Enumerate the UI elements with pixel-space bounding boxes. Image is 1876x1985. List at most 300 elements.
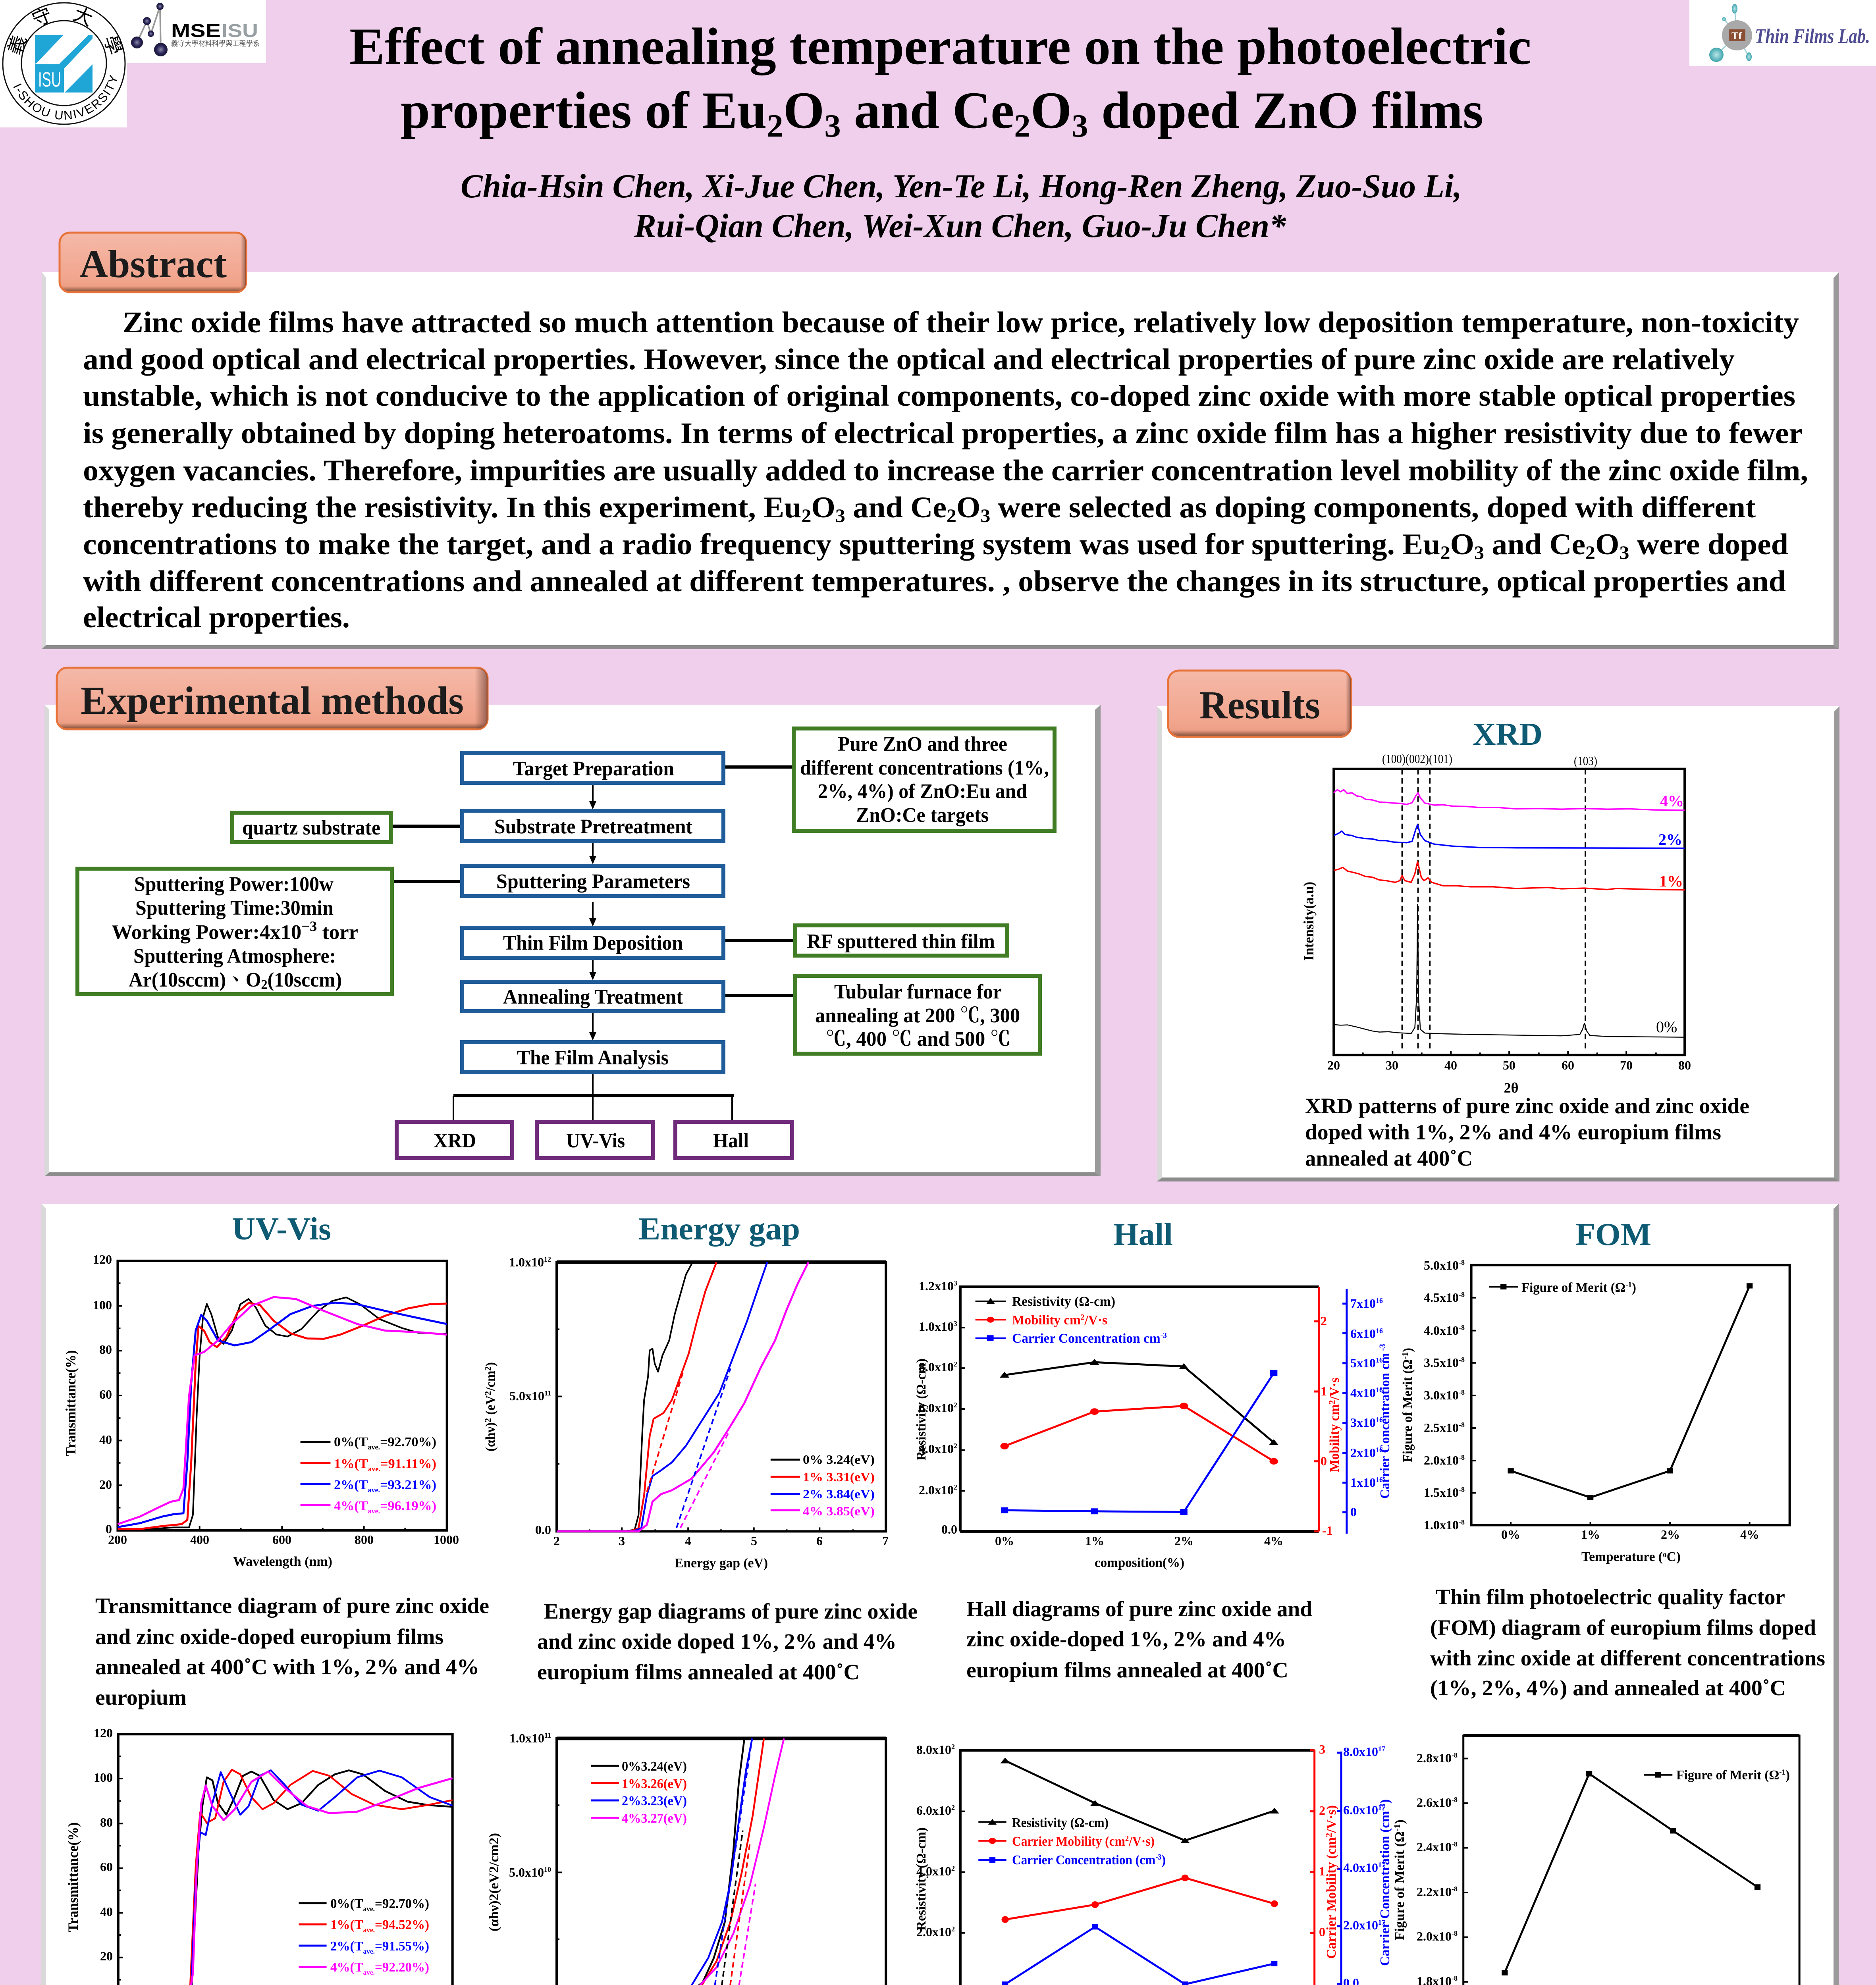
chart: UV-Vis cerium: =91.55%) (375, 1939, 429, 1954)
chart: Hall europium: 16 (1376, 1476, 1383, 1484)
abstract text: and Ce (1484, 528, 1585, 561)
step: Sputtering Parameters: Sputtering Parameters (496, 870, 690, 893)
note: targets: ZnO:Ce targets (856, 804, 989, 827)
chart: Hall cerium: 4.0x10 (916, 1864, 951, 1878)
methods frame (44, 705, 1101, 1176)
chart: UV-Vis europium: 60 (99, 1387, 112, 1401)
note: targets (794, 728, 1055, 831)
chart: FOM cerium: 2.4x10 (1417, 1840, 1452, 1854)
chart: FOM europium: 2.5x10 (1424, 1420, 1459, 1435)
note: targets: different concentrations (1%, (800, 757, 1049, 779)
note: quartz substrate: quartz substrate (242, 817, 380, 839)
chart: Hall cerium: 2 (951, 1743, 955, 1751)
heading: Energy gap: Energy gap (638, 1212, 800, 1247)
chart: UV-Vis cerium: 0%(T (330, 1896, 364, 1911)
chart: Hall cerium: 6.0x10 (1343, 1803, 1378, 1817)
chart: Hall europium: 16 (1376, 1327, 1383, 1335)
abstract text: 2 (1440, 542, 1450, 563)
caption: Hall europium (966, 1597, 1312, 1682)
note: targets: Pure ZnO and three (838, 733, 1007, 755)
chart: Hall europium: 2 (954, 1401, 957, 1409)
caption: UV-Vis europium (95, 1594, 489, 1709)
chart: XRD patterns: 40 (1444, 1058, 1457, 1072)
chart: Hall cerium: -3 (1155, 1853, 1162, 1862)
chart: Hall cerium: Carrier Mobility (cm (1324, 1837, 1339, 1959)
title: O (783, 81, 824, 139)
chart: UV-Vis europium: =92.70%) (380, 1435, 436, 1449)
chart: FOM cerium: ) (1785, 1768, 1790, 1783)
chart: Hall cerium: 2 (951, 1804, 955, 1812)
logo: MSEISU: MSE (171, 20, 221, 41)
chart: XRD patterns: (100)(002)(101) (1382, 752, 1452, 766)
chart: FOM europium: 2.0x10 (1424, 1453, 1459, 1467)
chart: Hall europium: 4x10 (1350, 1386, 1376, 1400)
chart: Hall cerium: 17 (1378, 1745, 1385, 1753)
chart: FOM europium: 1.0x10 (1424, 1518, 1459, 1532)
chart: Hall europium: Carrier Concentration cm (1378, 1347, 1392, 1499)
results frame (1157, 706, 1839, 1181)
chart: Hall europium: 16 (1376, 1297, 1383, 1305)
methods heading tab: Experimental methods (81, 678, 464, 723)
chart: UV-Vis europium: 0%(T (334, 1435, 368, 1449)
abstract frame (42, 272, 1839, 649)
chart: Hall europium: 6.0x10 (919, 1401, 954, 1415)
chart: energy gap cerium: 1%3.26(eV) (622, 1777, 687, 1791)
abstract text: 3 (980, 505, 990, 526)
chart: Hall cerium: Carrier Mobility (cm (1012, 1834, 1134, 1849)
chart: FOM europium: ) (1632, 1280, 1636, 1295)
chart: Hall europium: Resistivity (Ω-cm) (1012, 1294, 1115, 1309)
chart: FOM europium (1400, 1258, 1790, 1564)
abstract text: 2 (1585, 542, 1595, 563)
chart: Hall cerium: 8.0x10 (916, 1742, 951, 1757)
note: sputtering conditions: Ar(10sccm)、O (129, 969, 267, 991)
chart: UV-Vis cerium: =94.52%) (375, 1918, 429, 1932)
chart: Hall cerium: 2 (1324, 1833, 1334, 1837)
chart: Hall europium: 2 (954, 1360, 957, 1368)
chart: UV-Vis europium: 600 (272, 1532, 291, 1547)
chart: Hall europium: 16 (1376, 1386, 1383, 1394)
logo: MSEISU: 義守大學材料科學與工程學系 (171, 40, 260, 48)
logo: Thin Films Lab: Tf (1731, 30, 1742, 42)
abstract text: 2 (801, 505, 811, 526)
step: Thin Film Deposition: Thin Film Deposition (503, 932, 683, 954)
authors: Chia-Hsin Chen, Xi-Jue Chen, Yen-Te Li, Hong-Ren Zheng, Zuo-Suo Li, (461, 168, 1462, 205)
chart: FOM cerium: -8 (1452, 1885, 1458, 1893)
chart: Hall cerium: 17 (1378, 1918, 1385, 1926)
chart: FOM cerium: 2.6x10 (1417, 1795, 1452, 1810)
caption: energy gap europium (537, 1599, 918, 1684)
abstract text: Zinc oxide films have attracted so much attention because of their low price, relatively low deposition temperature, non-toxicity (123, 306, 1799, 339)
chart: Hall europium: 3 (954, 1320, 957, 1328)
chart: energy gap europium: 4% 3.85(eV) (803, 1504, 875, 1518)
chart: Hall europium: 8.0x10 (919, 1360, 954, 1374)
chart: UV-Vis europium: ave. (368, 1443, 380, 1451)
caption: FOM europium: with zinc oxide at different concentrations (1430, 1646, 1825, 1670)
chart: Hall europium: -1 (1322, 1523, 1333, 1538)
chart: energy gap europium: 2 (483, 1366, 493, 1371)
chart: FOM europium: 5.0x10 (1424, 1258, 1459, 1272)
chart: FOM europium: Figure of Merit (Ω (1521, 1280, 1629, 1295)
chart: energy gap europium: 2 (483, 1391, 493, 1395)
chart: energy gap europium (483, 1255, 889, 1571)
note: tubular furnace (795, 976, 1040, 1054)
chart: UV-Vis cerium: 40 (100, 1904, 113, 1919)
logo: MSEISU: ISU (222, 20, 258, 41)
caption: UV-Vis europium: europium (95, 1685, 187, 1709)
chart: FOM europium: -8 (1459, 1388, 1465, 1396)
flowchart arrowheads (589, 801, 596, 1041)
chart: FOM europium: 0% (1501, 1527, 1520, 1542)
abstract text: unstable, which is not conducive to the application of original components, co-doped zinc oxide with more stable optical properties (83, 380, 1795, 412)
abstract text: were selected as doping components, doped with different (990, 491, 1756, 524)
abstract text: oxygen vacancies. Therefore, impurities are usually added to increase the carrier concentration level mobility of the zinc oxide film, (83, 454, 1808, 487)
chart: FOM europium: -8 (1459, 1356, 1465, 1364)
heading: FOM: FOM (1575, 1217, 1651, 1252)
chart: UV-Vis cerium: Transmittance(%) (65, 1822, 81, 1932)
chart: Hall europium: 1x10 (1350, 1475, 1376, 1490)
authors: Rui-Qian Chen, Wei-Xun Chen, Guo-Ju Chen* (634, 207, 1286, 245)
chart: UV-Vis europium: Wavelength (nm) (233, 1554, 332, 1569)
chart: energy gap europium: 4 (685, 1534, 691, 1548)
chart: FOM europium: 4.5x10 (1424, 1290, 1459, 1305)
note: tubular furnace: annealing at 200 ℃, 300 (815, 1004, 1020, 1027)
chart: energy gap europium: ) (483, 1362, 498, 1366)
chart: energy gap europium: (αhν) (483, 1421, 498, 1451)
methods heading tab (57, 668, 488, 729)
chart: Hall europium: /V·s (1327, 1378, 1342, 1401)
chart: FOM europium: -8 (1459, 1291, 1465, 1299)
chart: energy gap cerium: 4%3.27(eV) (622, 1811, 687, 1826)
chart: Hall cerium: ) (1162, 1853, 1166, 1867)
chart: Hall cerium: 17 (1378, 1861, 1385, 1869)
chart: Hall europium: 6x10 (1350, 1326, 1376, 1341)
chart: UV-Vis europium: 800 (355, 1532, 374, 1547)
caption: FOM europium: (FOM) diagram of europium films doped (1430, 1615, 1816, 1640)
chart: UV-Vis europium: 80 (99, 1342, 112, 1357)
chart: energy gap cerium: 0%3.24(eV) (622, 1759, 687, 1774)
abstract heading tab: Abstract (79, 242, 227, 286)
chart: UV-Vis cerium: 4%(T (330, 1960, 364, 1975)
results 2 frame (41, 1204, 1839, 1985)
caption: UV-Vis europium: annealed at 400˚C with 1%, 2% and 4% (95, 1655, 479, 1679)
chart: XRD patterns: (103) (1574, 754, 1597, 768)
chart: FOM cerium: 2.2x10 (1417, 1885, 1452, 1899)
chart: Hall europium: 3 (954, 1279, 957, 1287)
chart: Hall europium: 2 (1081, 1313, 1085, 1322)
chart: UV-Vis europium: 40 (99, 1432, 112, 1447)
abstract text: were doped (1629, 528, 1788, 561)
chart: UV-Vis cerium: 1%(T (330, 1918, 364, 1932)
chart: UV-Vis europium: 400 (190, 1532, 209, 1547)
step: Thin Film Deposition (462, 928, 723, 958)
abstract text: 3 (1620, 542, 1629, 563)
chart: UV-Vis cerium: =92.70%) (375, 1896, 429, 1911)
chart: energy gap europium: 11 (544, 1389, 551, 1397)
chart: FOM europium: Figure of Merit (Ω (1400, 1355, 1415, 1462)
chart: energy gap europium: 1.0x10 (509, 1255, 544, 1269)
title: Effect of annealing temperature on the photoelectric (349, 17, 1531, 75)
panel: results XRD (1157, 671, 1839, 1181)
abstract text: is generally obtained by doping heteroatoms. In terms of electrical properties, a zinc oxide film has a higher resistivity due to fewer (83, 417, 1803, 450)
chart: Hall europium: 16 (1376, 1446, 1383, 1454)
chart: Hall cerium: 2.0x10 (1343, 1918, 1378, 1932)
chart: FOM cerium: 2.8x10 (1417, 1751, 1452, 1765)
chart: UV-Vis cerium (65, 1726, 465, 1985)
chart: Hall europium: 2 (1321, 1314, 1327, 1328)
chart: FOM europium: -8 (1459, 1258, 1465, 1266)
abstract text: O (1595, 528, 1620, 561)
chart: Hall cerium: 2 (951, 1864, 955, 1872)
chart: energy gap cerium (487, 1731, 893, 1985)
authors (461, 168, 1462, 245)
heading: Hall: Hall (1113, 1217, 1173, 1252)
flowchart connectors (393, 767, 793, 1120)
note: tubular furnace: Tubular furnace for (834, 981, 1002, 1003)
chart: Hall cerium: 8.0x10 (1343, 1744, 1378, 1759)
chart: UV-Vis cerium: ave. (363, 1968, 375, 1976)
chart: XRD patterns: 20 (1327, 1058, 1340, 1072)
chart: XRD patterns: 1% (1659, 872, 1683, 890)
chart: FOM europium: ) (1400, 1348, 1415, 1352)
title: 3 (824, 108, 841, 144)
chart: FOM europium: -8 (1459, 1324, 1465, 1332)
chart: energy gap europium: /cm (483, 1371, 498, 1391)
note: sputtering conditions: Working Power:4x10 (112, 921, 299, 944)
chart: UV-Vis cerium: 120 (94, 1726, 113, 1740)
chart: FOM europium: -1 (1625, 1280, 1632, 1289)
abstract text: O (811, 491, 835, 524)
chart: FOM europium: 1.5x10 (1424, 1485, 1459, 1499)
chart: Hall europium: 2 (954, 1483, 957, 1491)
step: Substrate Pretreatment: Substrate Pretreatment (494, 815, 693, 838)
caption: FOM europium (1430, 1585, 1825, 1700)
title: O (1031, 81, 1072, 139)
note: RF sputtered thin film: RF sputtered thin film (807, 930, 995, 953)
title: 2 (767, 108, 783, 144)
note: sputtering conditions: (10sccm) (268, 969, 342, 991)
chart: UV-Vis europium: 1%(T (334, 1457, 368, 1471)
chart: FOM europium: 2% (1661, 1527, 1680, 1542)
analysis: UV-Vis: UV-Vis (566, 1129, 625, 1152)
logo: I-Shou University: 大 (70, 4, 96, 30)
panel: experimental methods (44, 668, 1101, 1176)
chart: XRD patterns: 0% (1656, 1018, 1677, 1036)
chart: FOM cerium: 2.0x10 (1417, 1929, 1452, 1943)
chart: energy gap cerium: 10 (544, 1866, 551, 1873)
chart: UV-Vis europium: 4%(T (334, 1499, 368, 1513)
chart: UV-Vis cerium: ave. (363, 1947, 375, 1955)
analysis: XRD: XRD (434, 1129, 476, 1152)
logo: I-Shou University: I-SHOU UNIVERSITY (10, 73, 121, 123)
chart: energy gap europium: 5.0x10 (509, 1389, 544, 1403)
abstract heading tab (60, 233, 246, 292)
chart: energy gap europium: 0% 3.24(eV) (803, 1452, 875, 1467)
step: Annealing Treatment (462, 982, 723, 1011)
XRD caption: doped with 1%, 2% and 4% europium films (1305, 1120, 1721, 1144)
caption: FOM europium: (1%, 2%, 4%) and annealed at 400˚C (1430, 1676, 1786, 1700)
chart: XRD patterns: 70 (1620, 1058, 1633, 1072)
chart: energy gap europium: 2 (553, 1534, 560, 1548)
analysis: Hall: Hall (713, 1129, 749, 1152)
chart: FOM cerium: Figure of Merit (Ω (1392, 1833, 1407, 1940)
chart: XRD patterns: Intensity(a.u) (1301, 882, 1317, 961)
chart: Hall cerium: 2.0x10 (916, 1925, 951, 1939)
logo: I-Shou University: ISU (38, 68, 61, 91)
chart: energy gap europium: (eV (483, 1395, 498, 1418)
logo: I-Shou University: 義 (5, 33, 31, 58)
abstract text: O (956, 491, 980, 524)
caption: Hall europium: europium films annealed at 400˚C (966, 1658, 1288, 1682)
chart: UV-Vis europium: 1000 (434, 1532, 459, 1547)
abstract text: 3 (835, 505, 845, 526)
note: targets: 2%, 4%) of ZnO:Eu and (818, 780, 1027, 803)
chart: UV-Vis europium: ave. (368, 1507, 380, 1515)
chart: energy gap europium: 12 (544, 1255, 551, 1263)
caption: energy gap europium: and zinc oxide doped 1%, 2% and 4% (537, 1629, 897, 1654)
chart: Hall europium: 2.0x10 (919, 1483, 954, 1497)
chart: FOM europium: o (1663, 1550, 1667, 1559)
chart: Hall europium: 1.0x10 (919, 1319, 954, 1334)
chart: Hall cerium: 4.0x10 (1343, 1860, 1378, 1875)
chart: XRD patterns: 2θ (1504, 1080, 1518, 1096)
chart: UV-Vis europium: 2%(T (334, 1478, 368, 1492)
chart: energy gap cerium: 11 (544, 1731, 551, 1739)
XRD caption: XRD patterns of pure zinc oxide and zinc oxide (1305, 1094, 1749, 1118)
chart: Hall cerium: 3 (1319, 1742, 1325, 1756)
step: The Film Analysis (462, 1042, 723, 1072)
panel: UV-Vis, energy gap, Hall and FOM results (41, 1204, 1839, 1985)
chart: Hall cerium: Carrier Concentration (cm (1012, 1853, 1168, 1867)
note: sputtering conditions: Sputtering Power:100w (134, 873, 334, 896)
abstract text: concentrations to make the target, and a radio frequency sputtering system was used for sputtering. Eu (83, 528, 1391, 561)
note: sputtering conditions: −3 (301, 918, 317, 934)
chart: FOM cerium: -8 (1452, 1796, 1458, 1804)
caption: UV-Vis europium: and zinc oxide-doped europium films (95, 1625, 443, 1649)
chart: Hall europium: 4.0x10 (919, 1442, 954, 1456)
chart: FOM europium: -8 (1459, 1486, 1465, 1494)
chart: UV-Vis europium: 20 (99, 1477, 112, 1492)
note: sputtering conditions: Sputtering Time:30min (135, 897, 334, 919)
chart: XRD patterns: 50 (1503, 1058, 1515, 1072)
chart: energy gap europium: 7 (882, 1534, 889, 1548)
panel: abstract (42, 233, 1839, 649)
chart: Hall europium: 16 (1376, 1416, 1383, 1424)
chart: energy gap europium: 5 (751, 1534, 757, 1548)
chart: Hall europium: -3 (1377, 1344, 1387, 1353)
note: sputtering conditions: 2 (261, 977, 268, 992)
chart: FOM cerium: -8 (1452, 1929, 1458, 1937)
chart: FOM cerium: ) (1392, 1819, 1407, 1824)
chart: FOM cerium: -8 (1452, 1751, 1458, 1759)
chart: Hall europium: 2 (1327, 1400, 1337, 1404)
step: Target Preparation (462, 753, 723, 783)
chart: Hall europium: 2% (1174, 1534, 1193, 1548)
step: The Film Analysis: The Film Analysis (517, 1046, 669, 1069)
logo: MSEISU (127, 0, 266, 63)
abstract text: with different concentrations and annealed at different temperatures. , observe the changes in its structure, optical properties and (83, 565, 1786, 598)
chart: FOM cerium: -8 (1452, 1840, 1458, 1848)
abstract text: 3 (1474, 542, 1484, 563)
note: sputtering conditions (77, 869, 392, 994)
chart: energy gap europium: 3 (619, 1534, 625, 1548)
caption: energy gap europium: Energy gap diagrams of pure zinc oxide (544, 1599, 918, 1623)
chart: UV-Vis cerium: ave. (363, 1905, 375, 1913)
chart: Hall europium: /V·s (1084, 1313, 1107, 1328)
chart: Hall cerium: 0 (1319, 1925, 1325, 1939)
XRD caption (1305, 1094, 1749, 1170)
chart: energy gap europium: 2 (483, 1418, 493, 1422)
step: Target Preparation: Target Preparation (513, 757, 674, 780)
chart: FOM europium: -8 (1459, 1518, 1465, 1526)
step: Sputtering Parameters (462, 866, 723, 896)
chart: energy gap europium: Energy gap (eV) (675, 1556, 768, 1571)
step: Annealing Treatment: Annealing Treatment (503, 986, 683, 1008)
chart: energy gap cerium: (αhν)2(eV2/cm2) (487, 1833, 501, 1931)
chart: Hall europium: 0 (1321, 1454, 1327, 1468)
analysis: Hall (675, 1122, 792, 1158)
logo: I-Shou University: 學 (100, 33, 125, 58)
logo: Thin Films Lab (1689, 0, 1876, 66)
abstract text: thereby reducing the resistivity. In this experiment, Eu (83, 491, 775, 524)
chart: FOM europium: Temperature ( (1581, 1549, 1664, 1564)
chart: Hall cerium: Resistivity (Ω-cm) (1012, 1815, 1109, 1830)
chart: Hall europium: -3 (1161, 1331, 1167, 1340)
chart: Hall cerium: 2 (1319, 1803, 1325, 1817)
chart: energy gap europium: 0.0 (535, 1522, 551, 1537)
chart: Hall europium: 1.2x10 (919, 1279, 954, 1293)
chart: Hall europium: 0.0 (941, 1522, 957, 1536)
caption: Hall europium: Hall diagrams of pure zinc oxide and (966, 1597, 1312, 1621)
chart: Hall europium: composition(%) (1095, 1555, 1184, 1570)
abstract text (83, 306, 1808, 634)
chart: UV-Vis cerium: 100 (94, 1770, 113, 1785)
chart: XRD patterns: 80 (1678, 1058, 1691, 1072)
chart: FOM cerium: -8 (1452, 1974, 1458, 1982)
caption: Hall europium: zinc oxide-doped 1%, 2% and 4% (966, 1627, 1286, 1651)
chart: FOM cerium: -1 (1392, 1824, 1402, 1831)
chart: Hall europium: 0 (1350, 1505, 1357, 1519)
title (349, 17, 1531, 144)
abstract text: and Ce (845, 491, 947, 524)
chart: FOM europium: 4% (1740, 1527, 1759, 1542)
title: 3 (1072, 108, 1088, 144)
chart: FOM cerium (1392, 1736, 1799, 1985)
chart: Hall cerium: /V·s) (1324, 1805, 1339, 1833)
XRD heading: XRD (1473, 717, 1542, 752)
chart: Hall europium: 7x10 (1350, 1296, 1376, 1310)
chart: Hall europium: Resistivity (Ω-cm) (914, 1359, 929, 1461)
chart: UV-Vis europium: =96.19%) (380, 1499, 436, 1513)
chart: UV-Vis cerium: 20 (100, 1949, 113, 1963)
chart: Hall europium: 2 (954, 1442, 957, 1450)
chart: Hall europium (914, 1279, 1392, 1570)
results heading tab (1168, 671, 1351, 737)
abstract text: 2 (947, 505, 956, 526)
chart: Hall europium: Mobility cm (1327, 1402, 1342, 1472)
note: sputtering conditions: torr (317, 921, 358, 944)
chart: energy gap cerium: 2%3.23(eV) (622, 1794, 687, 1808)
chart: UV-Vis cerium: 80 (100, 1815, 113, 1829)
chart: energy gap europium: 2% 3.84(eV) (803, 1487, 875, 1501)
chart: Hall cerium: 2 (1125, 1834, 1129, 1843)
chart: energy gap europium: 6 (816, 1534, 823, 1548)
chart: energy gap europium: 1% 3.31(eV) (803, 1470, 875, 1484)
abstract text: O (1450, 528, 1474, 561)
chart: XRD patterns: 4% (1660, 792, 1684, 810)
step: Substrate Pretreatment (462, 811, 723, 841)
caption: UV-Vis europium: Transmittance diagram of pure zinc oxide (95, 1594, 489, 1618)
